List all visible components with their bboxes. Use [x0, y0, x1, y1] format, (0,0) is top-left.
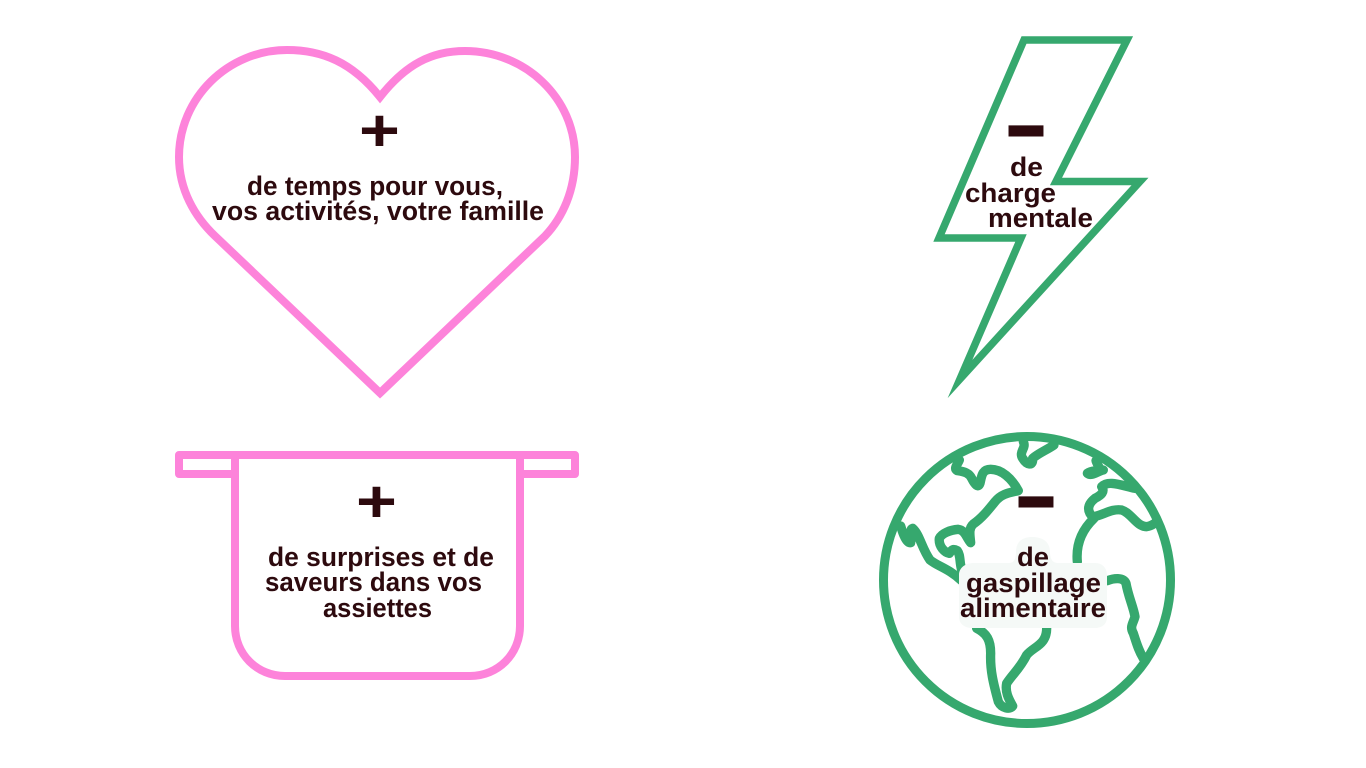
panel: pot, more flavours — [179, 455, 575, 676]
text: more surprises: de surprises et de — [268, 542, 494, 572]
text: less mental load: charge — [965, 178, 1056, 208]
text: more time: de temps pour vous, — [247, 171, 503, 201]
text: more surprises — [265, 542, 494, 623]
text: less mental load: de — [1010, 152, 1043, 182]
minus sign: – — [1016, 430, 1056, 556]
minus sign: – — [1006, 59, 1046, 185]
text: more time — [212, 171, 544, 226]
text: less mental load — [965, 152, 1093, 233]
text: less food waste: de — [1017, 542, 1049, 572]
text: less food waste: gaspillage — [966, 568, 1101, 598]
text: more surprises: assiettes — [323, 593, 432, 623]
panel: globe, less food waste — [884, 430, 1170, 724]
text: less mental load: mentale — [988, 203, 1093, 233]
label background patch — [959, 537, 1107, 628]
panel: lightning bolt, less mental load — [939, 40, 1140, 379]
panel: heart, more time — [179, 50, 575, 393]
icon: pot outline — [179, 455, 575, 676]
icon: lightning bolt outline — [939, 40, 1140, 379]
text: more time: vos activités, votre famille — [212, 196, 544, 226]
icon: heart outline — [179, 50, 575, 393]
text: less food waste: alimentaire — [960, 593, 1106, 623]
plus sign: + — [359, 96, 400, 163]
text: less food waste — [960, 542, 1106, 623]
icon: globe — [884, 436, 1170, 724]
text: more surprises: saveurs dans vos — [265, 567, 482, 597]
plus sign: + — [356, 467, 397, 534]
